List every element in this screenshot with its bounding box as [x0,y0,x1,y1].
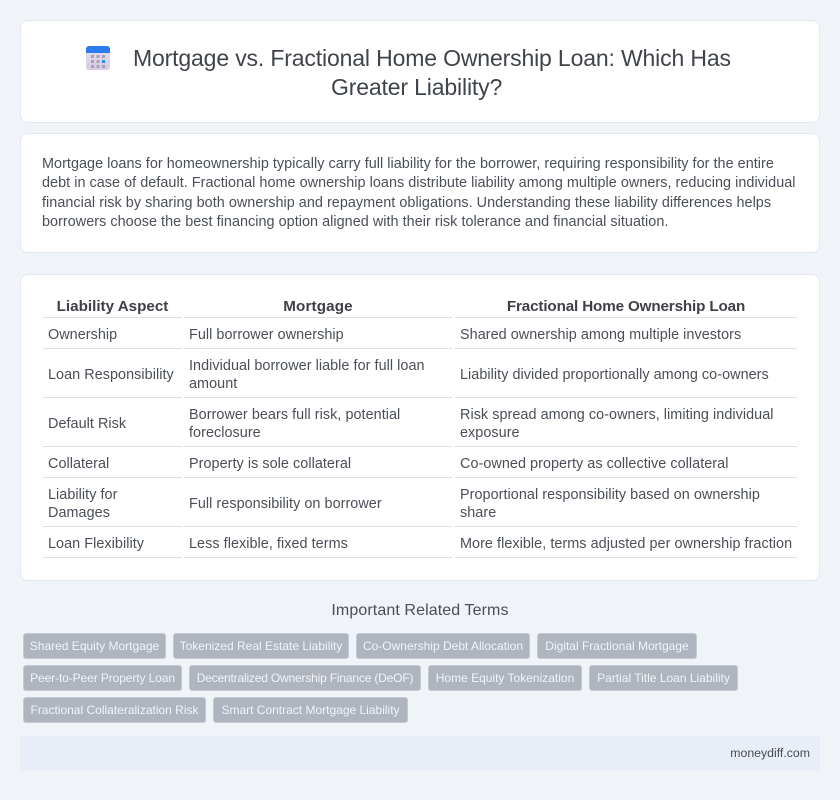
tag: Decentralized Ownership Finance (DeOF) [197,671,413,685]
tag [189,665,421,691]
footer source: moneydiff.com [730,746,810,760]
icon: calendar [86,46,110,70]
row: default risk: Default Risk [48,416,126,432]
tag [356,633,530,659]
table: Co-owned property as collective collateral [460,456,728,472]
table: Full borrower ownership [189,327,344,343]
table [43,298,797,558]
column heading: mortgage: Mortgage [283,298,353,315]
title: Mortgage vs. Fractional Home Ownership Loan: Which Has [133,45,731,71]
table: amount [189,376,237,392]
title: Greater Liability? [331,74,502,100]
table: Risk spread among co-owners, limiting individual [460,407,774,423]
footer bar [20,736,820,770]
tag: Co-Ownership Debt Allocation [363,639,523,653]
intro text: Mortgage loans for homeownership typically carry full liability for the borrower, requiring responsibility for the entire [42,156,774,172]
tag [23,633,166,659]
tag [23,665,182,691]
tag: Home Equity Tokenization [436,671,574,685]
tag: Digital Fractional Mortgage [545,639,689,653]
intro text: financial risk by sharing both ownership and repayment obligations. Understanding these liability differences helps [42,195,771,211]
table: Proportional responsibility based on ownership [460,487,760,503]
row: liability for damages: Damages [48,505,110,521]
column heading: liability aspect: Liability Aspect [57,298,168,315]
tag: Partial Title Loan Liability [597,671,730,685]
intro text: debt in case of default. Fractional home ownership loans distribute liability among multiple owners, reducing individual [42,175,796,191]
tag [589,665,738,691]
tag: Tokenized Real Estate Liability [180,639,342,653]
tag [173,633,349,659]
table: foreclosure [189,425,261,441]
table: Full responsibility on borrower [189,496,382,512]
table: Liability divided proportionally among co-owners [460,367,769,383]
table: exposure [460,425,520,441]
tag [428,665,582,691]
column heading: fractional loan: Fractional Home Ownership Loan [507,298,745,315]
row: liability for damages: Liability for [48,487,117,503]
title [133,45,731,100]
intro text: borrowers choose the best financing option aligned with their risk tolerance and financial situation. [42,214,668,230]
related term tags [23,633,738,723]
row: ownership: Ownership [48,327,117,343]
row: loan flexibility: Loan Flexibility [48,536,144,552]
row: liability for damages [48,487,118,521]
table: Individual borrower liable for full loan [189,358,425,374]
tag: Shared Equity Mortgage [30,639,159,653]
table: Borrower bears full risk, potential [189,407,400,423]
row: collateral: Collateral [48,456,109,472]
table: Property is sole collateral [189,456,351,472]
table: share [460,505,496,521]
intro text [42,156,796,230]
table: Shared ownership among multiple investors [460,327,741,343]
panel: introduction [20,133,820,253]
tag [537,633,697,659]
panel: comparison table [20,274,820,581]
tag: Fractional Collateralization Risk [30,703,199,717]
header panel [20,20,820,123]
tag: Peer-to-Peer Property Loan [30,671,175,685]
tag [213,697,408,723]
table: Less flexible, fixed terms [189,536,348,552]
tag [23,697,206,723]
table: More flexible, terms adjusted per ownership fraction [460,536,792,552]
heading: important related terms: Important Related Terms [331,602,509,619]
row: loan responsibility: Loan Responsibility [48,367,174,383]
tag: Smart Contract Mortgage Liability [221,703,400,717]
